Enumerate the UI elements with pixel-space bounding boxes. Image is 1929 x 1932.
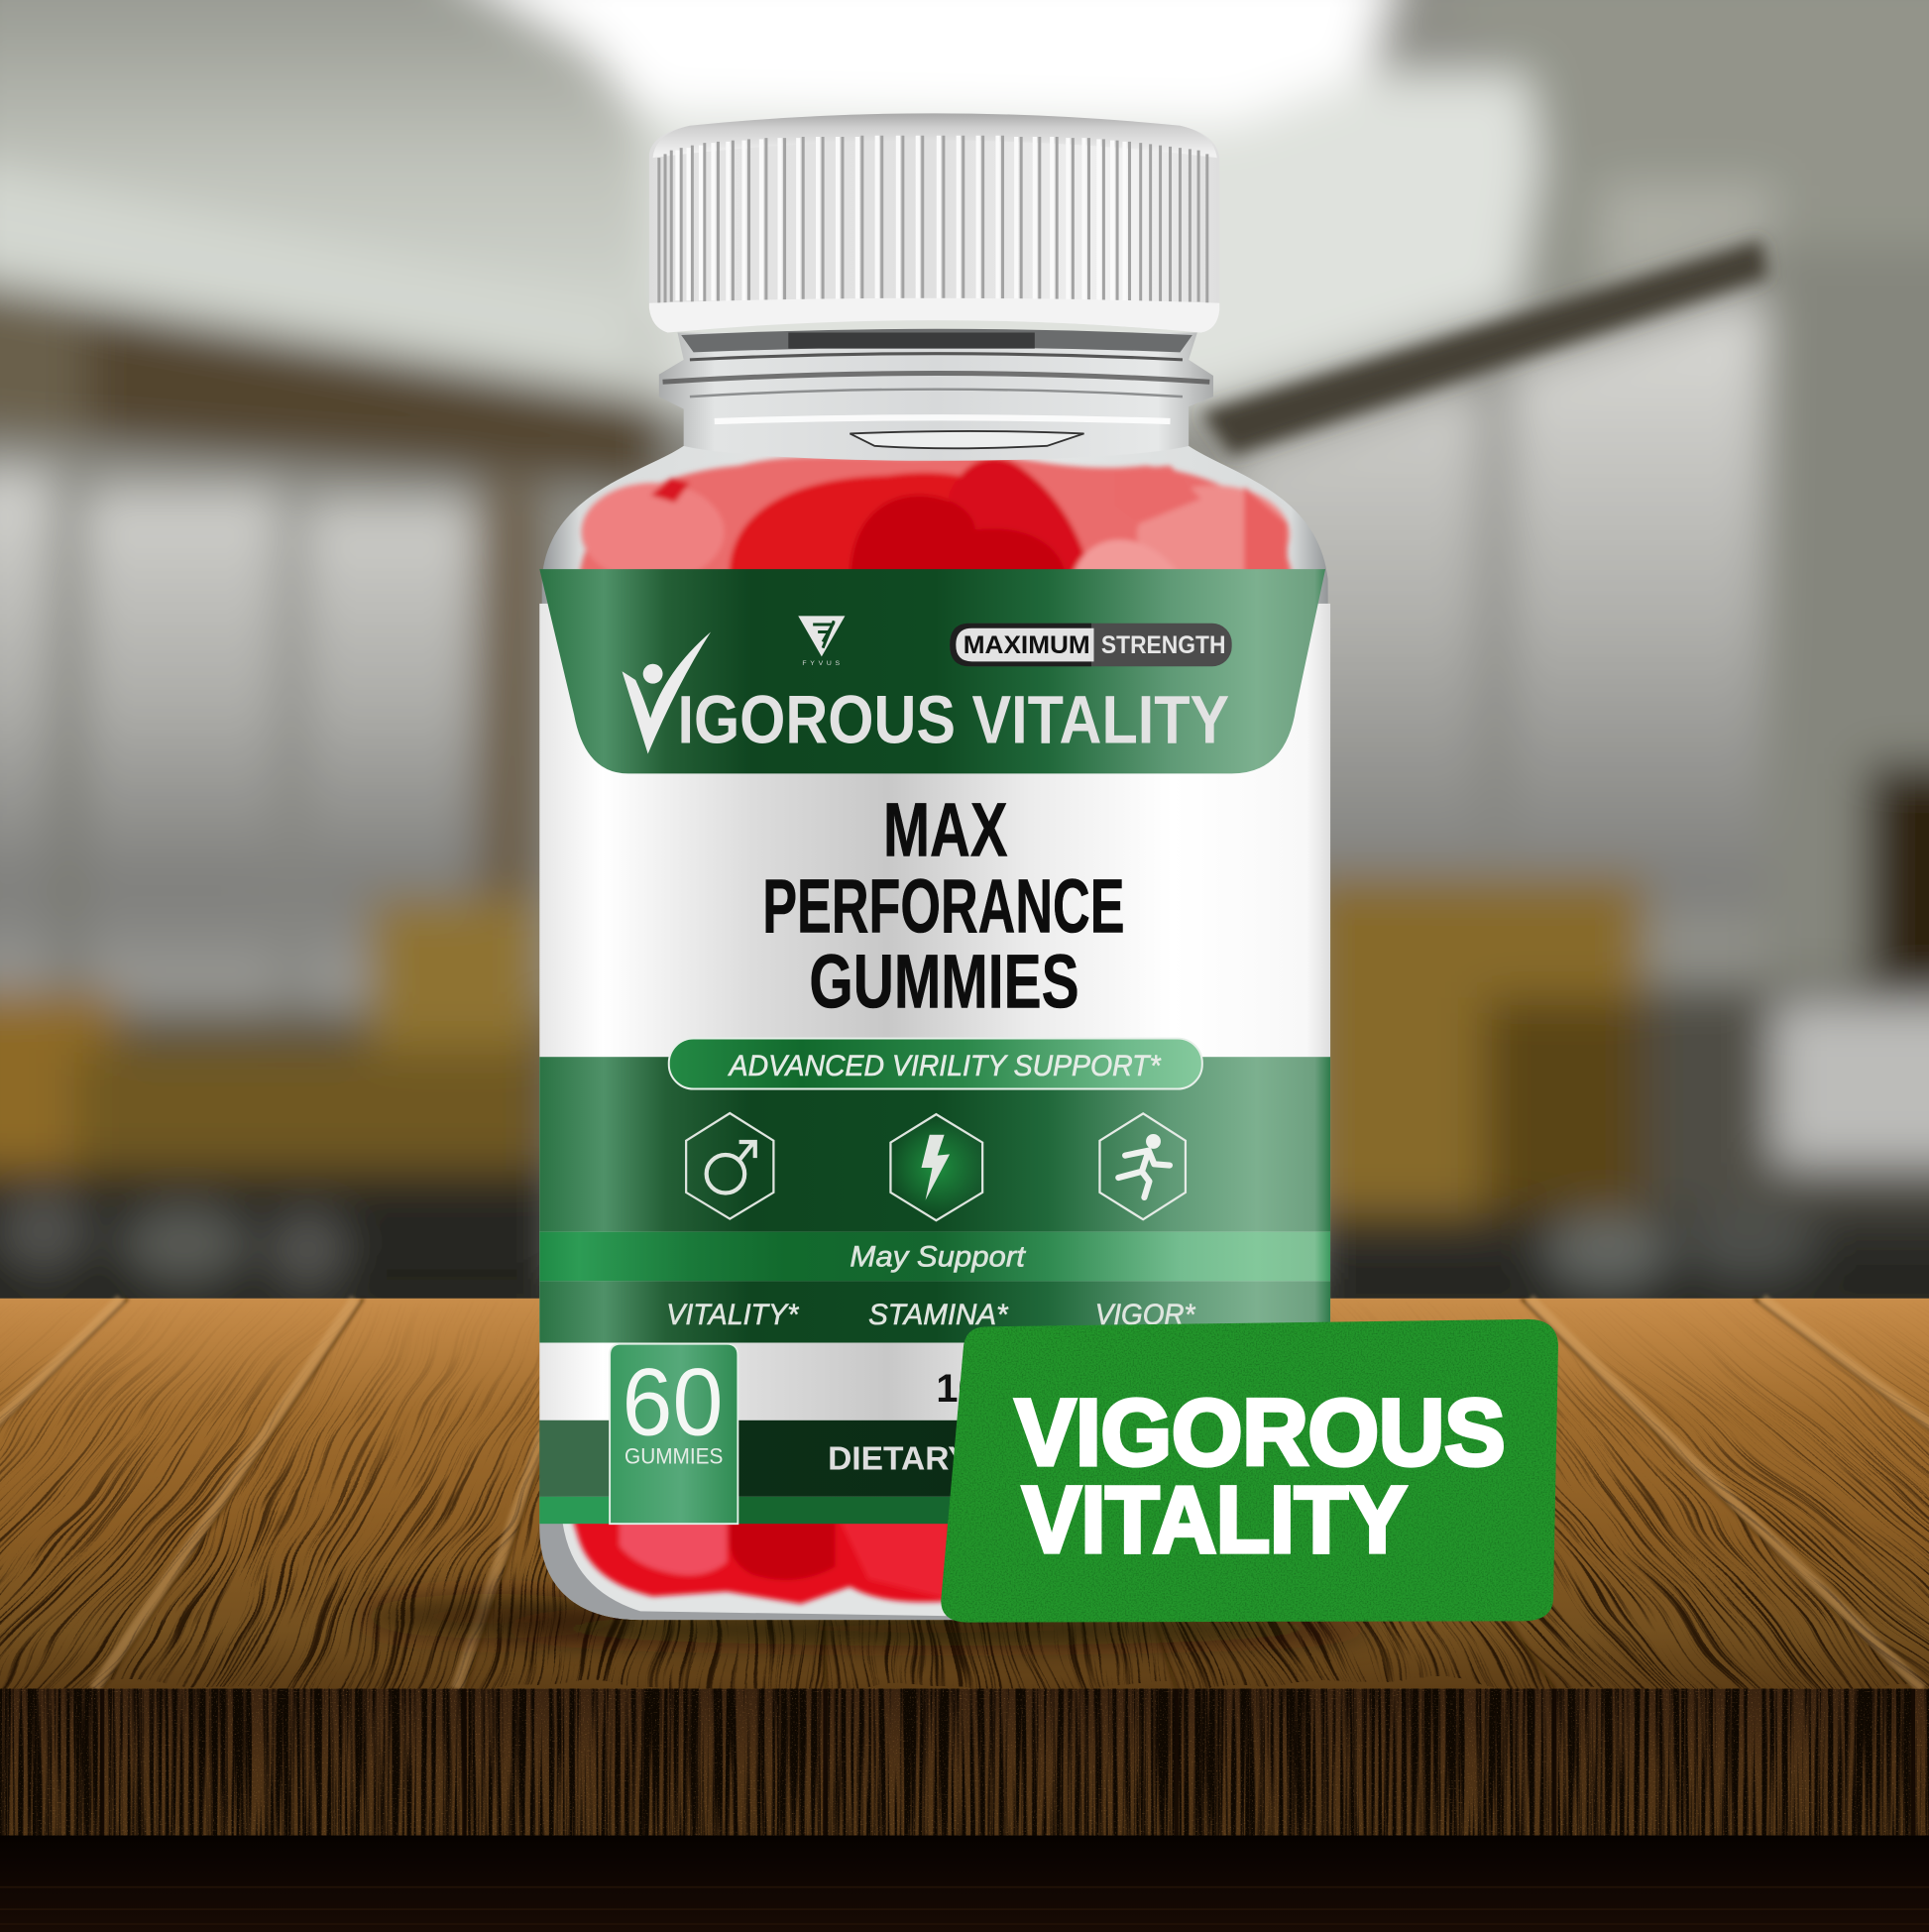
icon: swoosh v with figure bbox=[623, 631, 711, 754]
header banner bbox=[539, 569, 1325, 773]
icon: male symbol bbox=[686, 1113, 773, 1219]
label bbox=[539, 569, 1330, 1524]
benefit words: VITALITY* bbox=[666, 1299, 800, 1331]
benefit words bbox=[539, 1281, 1330, 1343]
product title: PERFORANCE bbox=[762, 864, 1125, 950]
neck thread lines bbox=[663, 329, 1209, 448]
fyvus logo bbox=[798, 616, 845, 667]
top gummies bbox=[577, 456, 1295, 569]
neck bbox=[659, 333, 1213, 461]
green brand badge: VIGOROUS bbox=[1015, 1382, 1506, 1486]
brand logo: IGOROUS VITALITY bbox=[677, 682, 1229, 757]
wooden table bbox=[0, 1299, 1929, 1932]
may support band: May Support bbox=[850, 1240, 1027, 1273]
product title: MAX bbox=[883, 788, 1007, 873]
cap bbox=[649, 113, 1219, 333]
icon: runner bbox=[1099, 1113, 1186, 1219]
bottom glass and gummies bbox=[539, 1524, 953, 1620]
maximum strength badge: MAXIMUM bbox=[964, 632, 1090, 659]
green brand badge: VITALITY bbox=[1022, 1469, 1407, 1573]
count box: 60 bbox=[623, 1348, 723, 1456]
benefit words: STAMINA* bbox=[868, 1299, 1009, 1331]
cap ridges bbox=[659, 136, 1207, 303]
dietary band: DIETARY bbox=[828, 1440, 970, 1477]
product title: GUMMIES bbox=[809, 940, 1079, 1025]
label white panel bbox=[539, 604, 1330, 1343]
green brand badge bbox=[936, 1315, 1564, 1626]
icon: lightning bolt bbox=[890, 1114, 982, 1220]
blurred office background bbox=[0, 0, 1929, 1330]
maximum strength badge: STRENGTH bbox=[1101, 632, 1225, 659]
lower white band bbox=[539, 1343, 1032, 1421]
table front edge bbox=[0, 1689, 1929, 1837]
advanced virility pill bbox=[669, 1039, 1202, 1089]
product title bbox=[762, 788, 1125, 1025]
glass body bbox=[539, 446, 1330, 1620]
advanced virility pill: ADVANCED VIRILITY SUPPORT* bbox=[728, 1050, 1162, 1082]
lower white band: 10 bbox=[936, 1367, 980, 1411]
bottom green strip bbox=[539, 1497, 1032, 1524]
benefit words: VIGOR* bbox=[1095, 1299, 1196, 1331]
may support band bbox=[539, 1232, 1330, 1281]
bottle shadow bbox=[357, 1594, 1380, 1646]
count box: GUMMIES bbox=[624, 1443, 723, 1468]
fyvus logo: FYVUS bbox=[802, 660, 844, 667]
table top surface bbox=[0, 1299, 1929, 1690]
table underside bbox=[0, 1836, 1929, 1932]
brand logo bbox=[623, 631, 1229, 757]
count box bbox=[610, 1344, 738, 1524]
plank seams bbox=[0, 1299, 1929, 1689]
dietary band bbox=[539, 1421, 1032, 1497]
green benefits panel bbox=[539, 1057, 1330, 1232]
bottle bbox=[537, 113, 1330, 1626]
maximum strength badge bbox=[950, 624, 1232, 666]
